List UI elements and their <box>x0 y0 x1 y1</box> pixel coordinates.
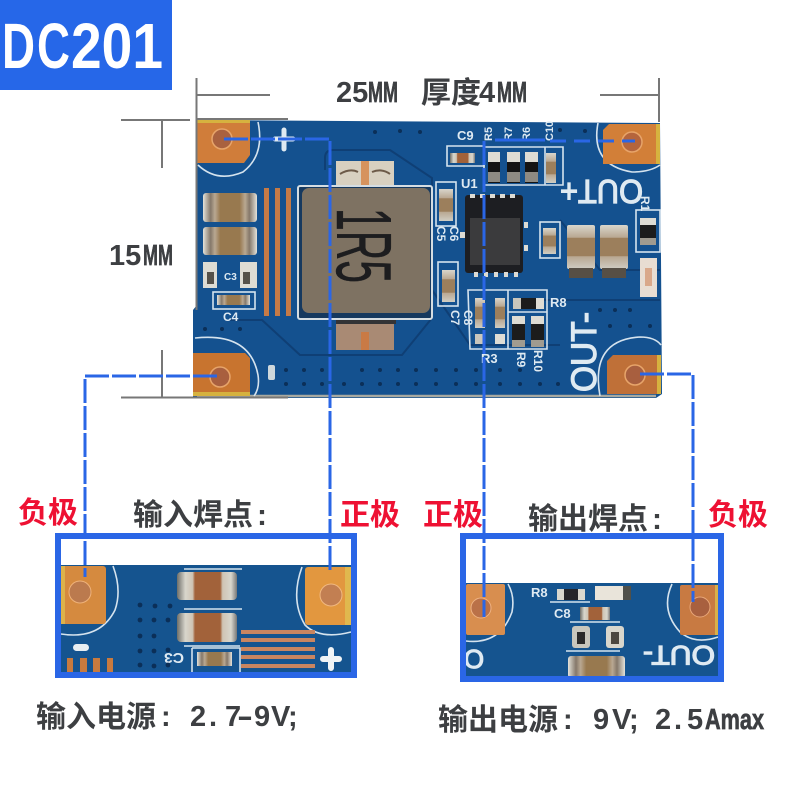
output silk labels: R8 <box>531 585 548 600</box>
text: input power: - <box>237 701 253 733</box>
wire: output plus vertical <box>482 141 486 617</box>
dimension label: width and thickness: 4 <box>479 77 495 109</box>
small component labels: C8 <box>461 310 475 326</box>
small component labels: R3 <box>481 351 498 366</box>
inductor body <box>298 186 432 319</box>
output frame <box>463 536 721 679</box>
label: output heading: : <box>652 503 662 536</box>
output silk labels: O <box>464 644 484 674</box>
panel: input solder pads <box>58 536 354 676</box>
silkscreen pad arcs <box>195 122 661 396</box>
pad: output plus <box>603 124 660 164</box>
output pad right <box>680 585 718 635</box>
dimension label: width and thickness: MM <box>497 77 527 109</box>
text: input power: 9V; <box>254 701 298 733</box>
title badge <box>0 0 172 90</box>
dimension label: width and thickness: 25 <box>336 77 368 109</box>
output-side silkscreen boxes <box>436 146 660 349</box>
output silk labels <box>464 585 715 674</box>
dimension label: width and thickness: 厚度 <box>421 68 481 112</box>
copper bars horizontal <box>241 630 315 675</box>
input pad left <box>61 566 106 624</box>
text: input power <box>36 692 298 736</box>
dimension label: width and thickness: MM <box>368 77 398 109</box>
silk: plus mark <box>275 130 293 149</box>
dimension label: width and thickness <box>336 68 527 112</box>
small component labels: R7 <box>503 127 515 141</box>
silk: OUT-: OUT- <box>565 312 604 392</box>
wire: output minus <box>640 374 693 602</box>
output close-up board <box>466 583 718 678</box>
output components <box>550 586 631 678</box>
wire: output plus dashed <box>550 140 635 142</box>
small component labels <box>434 121 652 372</box>
dimension label: height: 15 <box>109 240 141 272</box>
wire: input plus <box>224 139 330 572</box>
inductor end pads <box>336 161 396 350</box>
R1 and LED <box>640 218 657 297</box>
label: input positive: 正极 <box>340 490 400 534</box>
dimension lines <box>121 78 659 398</box>
vias <box>138 603 172 668</box>
resistor row <box>488 152 556 183</box>
small component labels: C6 <box>447 226 461 242</box>
output silk labels: OUT- <box>643 640 715 670</box>
small component labels: C5 <box>434 226 448 242</box>
text: output power: : <box>563 704 573 736</box>
text: output power <box>438 695 764 739</box>
capacitor C9 <box>450 153 475 163</box>
small passives C5 C6 <box>439 189 556 302</box>
pad: input minus <box>193 353 250 396</box>
lower resistor cluster <box>475 298 544 347</box>
panel: output solder pads <box>463 536 721 679</box>
small component labels: R1 <box>638 196 652 212</box>
copper traces <box>230 150 660 355</box>
inductor value: 1R5 <box>320 208 408 283</box>
silk: OUT+: OUT+ <box>560 173 643 210</box>
small component labels: R10 <box>531 350 545 372</box>
text: input power: 2.7 <box>190 701 241 733</box>
small component labels: C9 <box>457 128 474 143</box>
text: input power: : <box>161 701 171 733</box>
pad: output minus <box>607 355 661 394</box>
chip U1 <box>460 194 528 277</box>
small component labels: C7 <box>448 310 462 326</box>
plus mark <box>323 650 339 668</box>
label: input heading: : <box>257 499 267 532</box>
dimension label: height <box>109 240 173 272</box>
vias <box>203 128 652 386</box>
label: output negative: 负极 <box>708 490 768 534</box>
copper bars <box>264 188 291 316</box>
dimension label: height: MM <box>143 240 173 272</box>
left capacitors <box>203 193 257 255</box>
title badge: D <box>2 10 35 82</box>
C3 and C4: C4 <box>223 310 239 324</box>
input capacitors <box>177 569 242 646</box>
small component labels: R5 <box>483 127 495 141</box>
input close-up board <box>61 565 352 675</box>
small component labels: R8 <box>550 295 567 310</box>
main PCB board photo <box>193 120 662 398</box>
text: input power: 输入电源 <box>36 692 156 736</box>
text: output power: 输出电源 <box>438 695 558 739</box>
label: input negative: 负极 <box>18 488 78 532</box>
C3 and C4 <box>203 262 257 324</box>
C3 and C4: C3 <box>224 272 237 283</box>
small component labels: R6 <box>521 127 533 141</box>
large output capacitors <box>567 225 628 278</box>
wire: output plus <box>495 138 545 142</box>
label: input heading: 输入焊点 <box>133 490 253 534</box>
small component labels: R9 <box>514 352 528 368</box>
small LED mark <box>268 365 275 380</box>
output pad left <box>466 584 505 635</box>
label: output heading: 输出焊点 <box>528 494 648 538</box>
small component labels: U1 <box>461 176 478 191</box>
wire: input minus <box>85 376 217 577</box>
output silk labels: C8 <box>554 606 571 621</box>
small component labels: C10 <box>544 121 556 141</box>
small capacitor C3 <box>164 648 240 676</box>
pad: input plus <box>197 120 250 163</box>
input frame <box>58 536 354 675</box>
copper stubs <box>67 658 113 673</box>
input pad right <box>305 567 351 625</box>
label: output positive: 正极 <box>423 490 483 534</box>
minus mark <box>73 644 89 651</box>
text: output power: 9V;2.5 <box>593 704 703 736</box>
small capacitor C3: C3 <box>164 649 184 666</box>
text: output power: Amax <box>705 704 764 736</box>
title badge: C <box>37 10 70 82</box>
title badge: 201 <box>71 10 163 82</box>
